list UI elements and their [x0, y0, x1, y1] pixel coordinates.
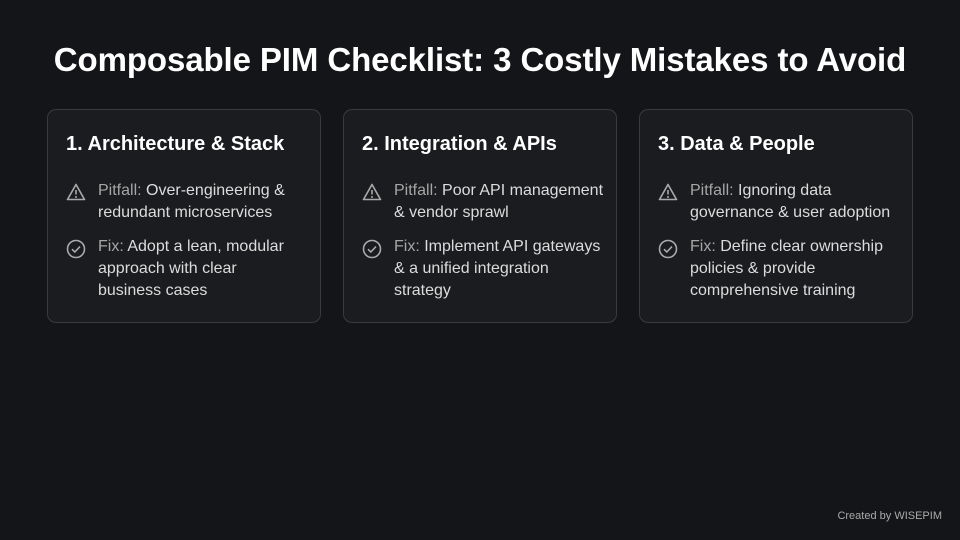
fix item: [66, 238, 284, 299]
fix item: [362, 238, 600, 299]
panel: architecture: approach with clear: [98, 260, 237, 277]
panel: architecture: Pitfall: Over-engineering &: [98, 182, 285, 199]
footer credit: Created by WISEPIM: [837, 510, 942, 522]
heading: 2. Integration & APIs: [362, 133, 557, 155]
panel: integration: & vendor sprawl: [394, 204, 509, 221]
panel: data & people: comprehensive training: [690, 282, 855, 299]
panel: architecture: redundant microservices: [98, 204, 272, 221]
title: Composable PIM Checklist: 3 Costly Mistakes to Avoid: [54, 41, 906, 78]
heading: 1. Architecture & Stack: [66, 133, 284, 155]
panel: integration: & a unified integration: [394, 260, 549, 277]
panel: data & people: governance & user adoption: [690, 204, 890, 221]
pitfall item: [66, 182, 285, 221]
panel: architecture: business cases: [98, 282, 207, 299]
panel: integration: strategy: [394, 282, 451, 299]
pitfall item: [362, 182, 603, 221]
panel: integration: Pitfall: Poor API management: [394, 182, 603, 199]
panel: architecture: Fix: Adopt a lean, modular: [98, 238, 284, 255]
panel: data & people: policies & provide: [690, 260, 815, 277]
fix item: [658, 238, 883, 299]
panel: integration: [343, 109, 617, 323]
panel: data & people: Fix: Define clear ownership: [690, 238, 883, 255]
panel: data & people: [639, 109, 913, 323]
panel: data & people: Pitfall: Ignoring data: [690, 182, 831, 199]
panel: integration: Fix: Implement API gateways: [394, 238, 600, 255]
heading: 3. Data & People: [658, 133, 815, 155]
panel: architecture: [47, 109, 321, 323]
pitfall item: [658, 182, 890, 221]
